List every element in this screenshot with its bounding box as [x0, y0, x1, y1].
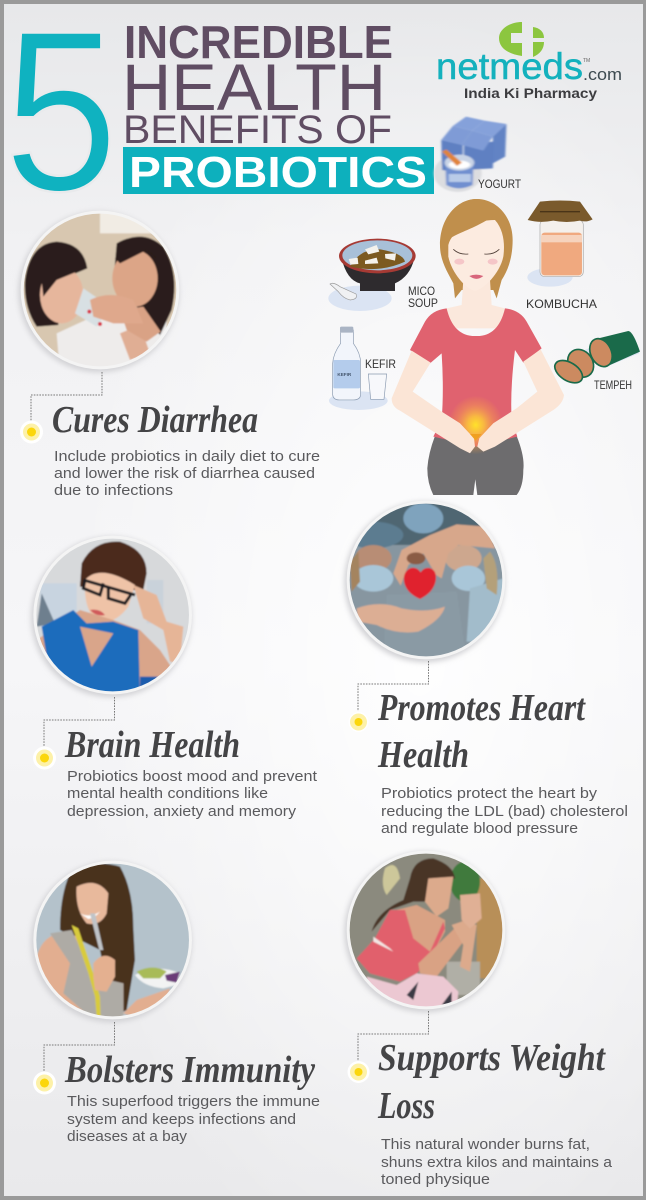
title line: health: HEALTH: [122, 50, 386, 124]
right arm: [477, 349, 564, 452]
logo: netmeds: [436, 22, 622, 101]
body text: due to infections: [54, 483, 173, 499]
photo: woman eating salad: [31, 860, 193, 1022]
tagline: India Ki Pharmacy: [464, 86, 598, 101]
title line: benefits of: BENEFITS OF: [123, 108, 392, 152]
body text: [67, 1094, 320, 1145]
body text: This natural wonder burns fat,: [381, 1137, 590, 1153]
heading: Supports Weight: [378, 1037, 606, 1079]
left arm: [392, 351, 475, 453]
face: [448, 220, 504, 291]
body text: Probiotics protect the heart by: [381, 786, 598, 802]
panel: brain health: [31, 536, 317, 820]
icon: tempeh: [551, 331, 640, 387]
navel diamond: [470, 434, 482, 441]
label: soup: SOUP: [408, 296, 438, 310]
body text: [67, 769, 317, 820]
heading: Loss: [377, 1085, 435, 1127]
panel: promotes heart health: [343, 501, 628, 837]
heading: [377, 1037, 606, 1127]
shirt: [410, 308, 542, 447]
title line: incredible: INCREDIBLE: [124, 16, 393, 68]
icon: kombucha jar: [527, 200, 593, 287]
body text: diseases at a bay: [67, 1129, 188, 1145]
label: kombucha: KOMBUCHA: [526, 297, 597, 311]
trademark: TM: [583, 58, 590, 64]
photo: woman with headache: [31, 536, 193, 703]
connector: [44, 697, 114, 747]
icon: yogurt pots: [434, 117, 506, 192]
body text: Include probiotics in daily diet to cure: [54, 449, 320, 465]
marker dot: [348, 712, 368, 732]
photo: woman exercising: [344, 851, 507, 1012]
icon: green cross mark: [499, 22, 544, 57]
heading: Brain Health: [64, 724, 240, 766]
marker dot: [20, 420, 43, 444]
connector: [44, 1022, 114, 1072]
label: miso soup: MICO: [408, 284, 435, 298]
body text: reducing the LDL (bad) cholesterol: [381, 804, 628, 820]
icon: miso soup: [328, 239, 416, 311]
body text: mental health conditions like: [67, 786, 268, 802]
wordmark: netmeds: [436, 46, 583, 87]
heading: Promotes Heart: [377, 687, 586, 729]
hair back: [440, 199, 513, 298]
body text: toned physique: [381, 1172, 490, 1188]
photo: hands holding red heart: [343, 501, 507, 662]
title banner: probiotics: PROBIOTICS: [129, 148, 427, 197]
label: kefir: KEFIR: [365, 357, 396, 371]
marker dot: [348, 1061, 370, 1083]
belly glow: [448, 396, 503, 454]
body text: [381, 1137, 613, 1188]
eyes and lips: [453, 249, 499, 254]
icon: kefir bottle and glass: KEFIR: [337, 372, 352, 377]
label: tempeh: TEMPEH: [594, 378, 632, 392]
connector: [358, 1011, 428, 1061]
heading: [377, 687, 586, 776]
body text: [54, 449, 320, 499]
marker dot: [33, 1072, 56, 1094]
body text: system and keeps infections and: [67, 1112, 296, 1128]
icon: kefir bottle and glass: [329, 327, 388, 410]
connector: [31, 372, 102, 422]
hair fringe: [445, 199, 497, 245]
panel: supports weight loss: [344, 851, 613, 1188]
illustration: woman with probiotic foods: [328, 199, 640, 495]
photo: mother giving child water: [18, 210, 180, 373]
body text: depression, anxiety and memory: [67, 804, 297, 820]
body text: [381, 786, 628, 837]
connector: [358, 661, 428, 711]
body text: Probiotics boost mood and prevent: [67, 769, 317, 785]
marker dot: [33, 746, 56, 770]
domain: .com: [583, 65, 622, 84]
heading: Cures Diarrhea: [52, 399, 258, 441]
pants: [427, 436, 524, 495]
body text: and regulate blood pressure: [381, 821, 578, 837]
panel: bolsters immunity: [31, 860, 320, 1145]
body text: and lower the risk of diarrhea caused: [54, 466, 315, 482]
body text: shuns extra kilos and maintains a: [381, 1155, 613, 1171]
heading: Health: [377, 734, 469, 776]
title: [4, 0, 434, 239]
heading: Bolsters Immunity: [64, 1049, 315, 1091]
woman figure: [392, 199, 564, 495]
label: yogurt: YOGURT: [478, 177, 522, 191]
body text: This superfood triggers the immune: [67, 1094, 320, 1110]
panel: cures diarrhea: [18, 210, 320, 499]
neck and chest: [447, 280, 505, 328]
